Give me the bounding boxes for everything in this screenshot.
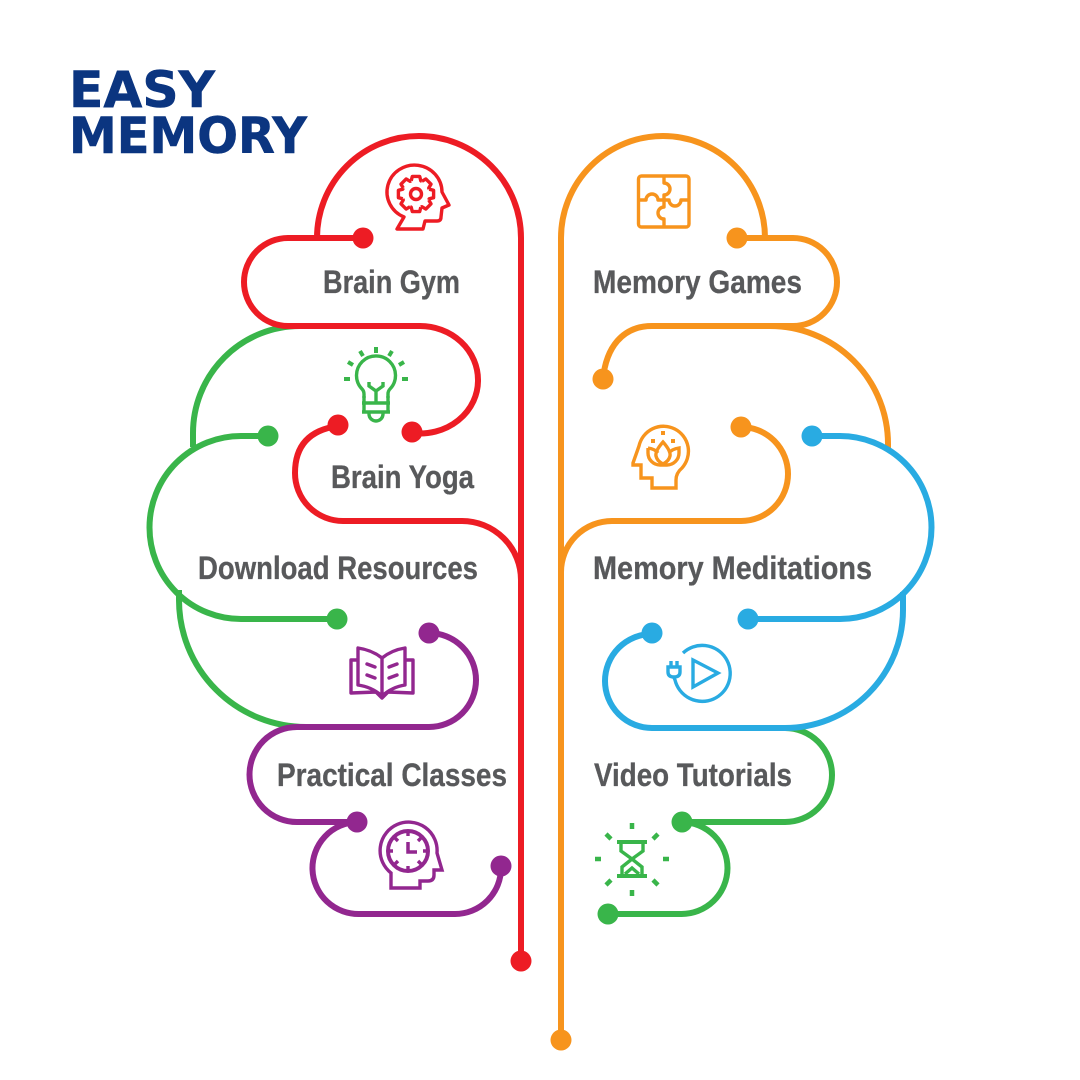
label: Brain Yoga: Brain Yoga xyxy=(331,459,474,495)
panel: Memory Meditations blue loops xyxy=(593,426,931,728)
panel: red main trunk and Brain Gym xyxy=(244,136,532,972)
icon: video play with plug xyxy=(668,645,730,701)
panel: Practical Classes purple loops xyxy=(250,622,512,914)
orange meditation dot xyxy=(730,416,752,438)
label: Download Resources: Download Resources xyxy=(198,550,478,586)
label: Brain Gym: Brain Gym xyxy=(323,264,460,300)
icon: light bulb xyxy=(344,347,408,421)
green Video Tutorials curve xyxy=(594,728,832,924)
panel: Brain Yoga red loop xyxy=(295,414,521,580)
icon: head with clock xyxy=(380,822,442,888)
panel: orange main trunk and Memory Games xyxy=(550,136,837,1050)
icon: open book xyxy=(351,648,413,698)
icon: puzzle xyxy=(638,176,689,227)
panel: Download Resources green loop xyxy=(149,426,478,630)
icon: hourglass xyxy=(595,823,669,896)
icon: head with lotus xyxy=(633,426,688,488)
title: Easy Memory logo: EASY xyxy=(69,61,216,119)
label: Video Tutorials: Video Tutorials xyxy=(594,757,792,793)
label: Memory Games: Memory Games xyxy=(593,264,802,300)
panel: orange meditation loop xyxy=(561,427,788,572)
title: Easy Memory logo xyxy=(69,61,308,165)
title: Easy Memory logo: MEMORY xyxy=(69,107,308,165)
label: Memory Meditations: Memory Meditations xyxy=(593,550,872,586)
orange outer curve, right side xyxy=(770,326,888,450)
icon: head with gear xyxy=(387,165,449,229)
green outer curves, left side xyxy=(179,326,306,727)
label: Practical Classes: Practical Classes xyxy=(277,757,507,793)
